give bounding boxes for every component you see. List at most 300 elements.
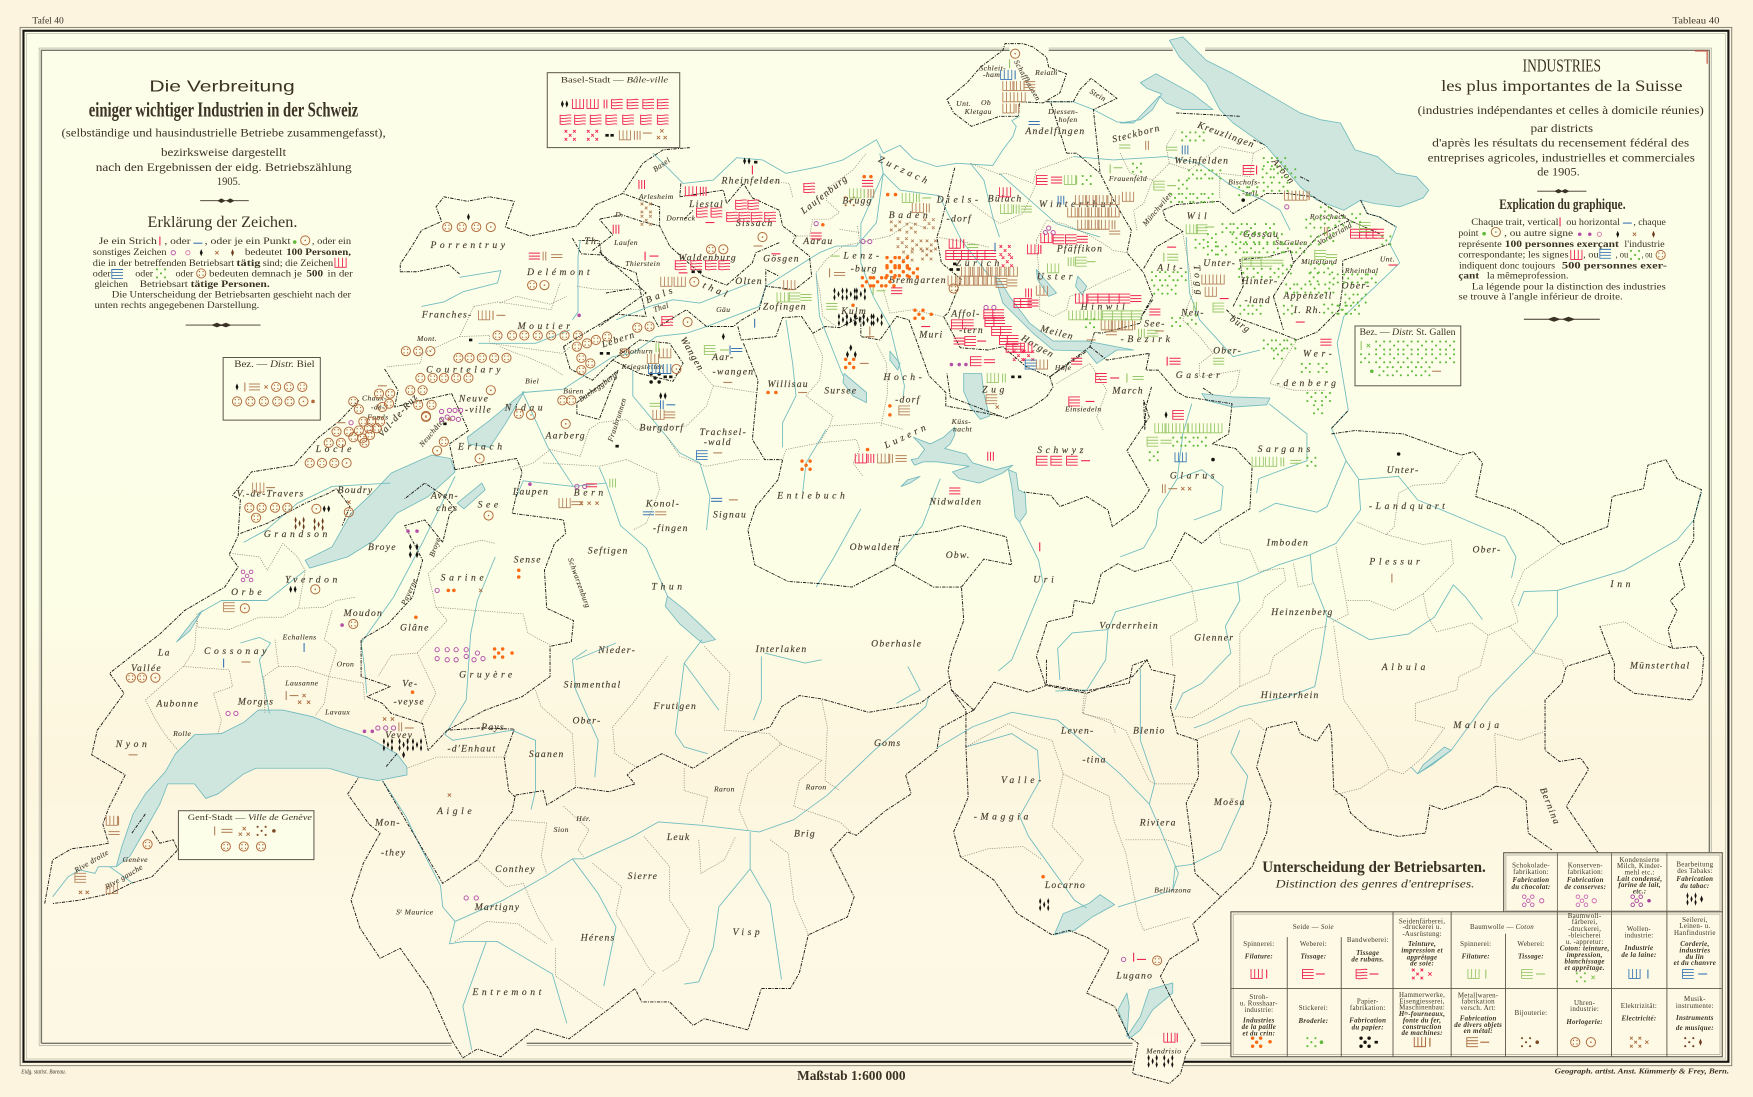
district labels: Kriegstetten (621, 362, 664, 371)
descriptive lines: par districts (1531, 122, 1594, 135)
district labels: Appenzell (1283, 291, 1333, 302)
district labels: Boudry (338, 485, 373, 496)
district labels: Aven- (430, 491, 459, 502)
legend cells: lower row: versch. Art: (1460, 1005, 1496, 1012)
legend cells: lower row: Papier- (1357, 998, 1379, 1005)
legend cells: wool and hemp: de la laine: (1621, 952, 1657, 959)
district labels: Lavaux (324, 708, 350, 717)
subtitle: (selbständige und hausindustrielle Betriebe zusammengefasst), (61, 126, 386, 139)
district labels: Orbe (231, 587, 265, 598)
district labels: Gäu (716, 305, 731, 314)
district labels: Thal (652, 301, 670, 314)
explanation text: bedeuten demnach je (209, 269, 302, 279)
district labels: Grandson (264, 529, 331, 540)
explanation text: gleichen (94, 280, 128, 290)
district labels: Brugg (842, 196, 873, 207)
legend cells: lower row: Stroh- (1249, 994, 1269, 1001)
legend cells: lower row: Horlogerie: (1565, 1019, 1603, 1026)
district labels: -veyse (393, 696, 425, 707)
district labels: Lugano (1115, 970, 1153, 981)
legend cells: wool and hemp: Hanfindustrie (1674, 930, 1716, 937)
legend cells: lower row: industrie: (1244, 1007, 1273, 1014)
district labels: Bischofs- (1228, 178, 1260, 187)
district labels: Bremgarten (889, 275, 947, 286)
legend cells: silk: de rubans. (1351, 957, 1384, 964)
district labels: Basel (651, 155, 672, 174)
district labels: Raron (805, 782, 827, 791)
legend table: upper box: fabrikation: (1513, 869, 1549, 876)
legend cells: cotton: blanchissage (1564, 958, 1605, 965)
district labels: Wer- (1303, 349, 1335, 360)
district labels: -dorf (947, 213, 972, 224)
district labels: Hinwil (1080, 302, 1128, 313)
legend table: upper box: Konserven- (1568, 862, 1603, 869)
explanation text: Je ein Strich (99, 237, 157, 247)
district labels: -land (1245, 295, 1271, 306)
district labels: Cossonay (204, 646, 270, 657)
legend heading: Unterscheidung der Betriebsarten: Distinction des genres d'entreprises. (1274, 878, 1475, 890)
district labels: Kulm (840, 306, 867, 317)
legend cells: wool and hemp: industries (1679, 947, 1710, 954)
explanation text: représente (1458, 240, 1502, 250)
district labels: Courtelary (426, 364, 504, 375)
district labels: Diessen- (1047, 107, 1078, 116)
legend cells: lower row: du papier: (1352, 1024, 1384, 1031)
district labels: Lebern (599, 329, 637, 351)
symbols: straw orange (411, 175, 1045, 878)
district labels: Imboden (1266, 538, 1309, 549)
district labels: Brig (794, 828, 816, 839)
district labels: Einsiedeln (1064, 405, 1102, 414)
ornament (186, 323, 260, 327)
district labels: V.-de-Travers (237, 489, 304, 500)
district labels: -tern (959, 325, 984, 336)
district labels: Maloja (1452, 720, 1503, 731)
legend cells: silk: Weberei: (1300, 941, 1327, 948)
district labels: Lausanne (284, 678, 319, 687)
symbols: silk red (529, 166, 1397, 1042)
district labels: -ham (983, 70, 1000, 79)
district labels: See (478, 500, 502, 511)
district labels: Gossau (1243, 229, 1279, 240)
explanation text: La légende pour la distinction des industries (1472, 282, 1666, 292)
district labels: Diels- (936, 194, 982, 205)
explanation text (1458, 217, 1667, 303)
district labels: Ob (981, 98, 991, 107)
legend cells: cotton: u. -appretur: (1566, 939, 1604, 946)
district labels: D. (614, 210, 624, 219)
district labels: Payerne (399, 577, 419, 607)
district labels: Simmenthal (564, 680, 621, 691)
district labels: Uri (1033, 575, 1057, 586)
legend table: upper box: Milch, Kinder- (1617, 863, 1663, 870)
district labels: Nidwalden (929, 496, 982, 507)
district labels: -denberg (1277, 378, 1340, 389)
right title block (1418, 56, 1704, 321)
legend cells: silk: impression et (1401, 948, 1444, 955)
district labels: Echallens (282, 633, 317, 642)
symbols: small crosses (79, 405, 1191, 894)
district labels: Aubonne (155, 699, 199, 710)
subtitle (61, 126, 386, 188)
legend cells: wool and hemp: industrie: (1624, 932, 1653, 939)
explanation text: Chaque trait, vertical (1471, 218, 1559, 228)
district labels: -wald (704, 437, 732, 448)
legend cells: wool and hemp: du lin (1686, 954, 1704, 961)
district labels: Locle (315, 444, 355, 455)
descriptive lines: d'après les résultats du recensement fédéral des (1432, 136, 1690, 149)
district labels: Affol- (950, 308, 981, 319)
district labels: Trachsel- (700, 427, 747, 438)
district labels: -zell (1242, 189, 1258, 198)
legend cells: lower row: Maschinenbau: (1399, 1004, 1445, 1011)
district labels: Saanen (529, 749, 565, 760)
district labels: -hofen (1056, 115, 1078, 124)
district labels: Frutigen (653, 701, 697, 712)
legend cells: lower row (1240, 992, 1714, 1048)
credit: statistical bureau: Eidg. statist. Bureau. (20, 1069, 66, 1076)
explanation text: correspondante; les signes (1458, 251, 1569, 261)
legend cells: wool and hemp (1621, 917, 1716, 978)
district labels: Leven- (1060, 726, 1095, 737)
district labels: Hinter- (1241, 276, 1278, 287)
legend cells: cotton: Baumwolle — Coton (1470, 924, 1534, 931)
legend cells: cotton: -bleicherei (1568, 932, 1601, 939)
legend cells: silk: Spinnerei: (1243, 941, 1274, 948)
district labels: Rheinthal (1344, 266, 1378, 275)
legend heading: Unterscheidung der Betriebsarten (1262, 859, 1486, 890)
district labels: -Bezirk (1121, 334, 1173, 345)
district labels: Porrentruy (429, 240, 509, 251)
district labels: Neu- (1180, 307, 1205, 318)
explanation text: indiquent donc toujours (1459, 261, 1556, 271)
district labels: Winterthur (1039, 199, 1116, 210)
district labels: Broye (427, 536, 443, 558)
district labels: Mendrisio (1145, 1046, 1181, 1055)
legend table: upper box: Bearbeitung (1676, 862, 1714, 869)
district labels: Oberhasle (871, 638, 922, 649)
symbols: watch circles (126, 49, 1162, 965)
legend cells: wool and hemp: Wollen- (1627, 926, 1651, 933)
explanation text: se trouve à l'angle inférieur de droite. (1458, 293, 1623, 303)
district labels: Schwarzenburg (566, 557, 592, 609)
district labels: Zurzach (876, 154, 932, 188)
subtitle: 1905. (217, 175, 240, 188)
district labels: Neuchâtel (417, 416, 446, 449)
district labels: Schwyz (1037, 445, 1087, 456)
symbols: brown straw / metal (75, 81, 1392, 893)
district labels: Bern (574, 487, 607, 498)
district labels: Aigle (436, 806, 475, 817)
legend table: upper box: fabrikation: (1567, 869, 1603, 876)
explanation text: , ou (1583, 251, 1599, 261)
district labels: Sion (554, 825, 569, 834)
legend table: upper box: du tabac: (1680, 883, 1709, 890)
legend cells: cotton: Baumwoll- (1568, 913, 1602, 920)
district labels: Unter- (1387, 465, 1419, 476)
district labels: -burg (851, 264, 878, 275)
legend cells: silk (1243, 918, 1445, 979)
district labels: Franches- (421, 310, 472, 321)
legend table: upper box: Kondensierte (1620, 857, 1660, 864)
legend cells: lower row: Musik- (1684, 996, 1706, 1003)
legend table: upper box: Fabrication (1676, 876, 1713, 883)
district labels: Val-de-Ruz (376, 392, 421, 439)
legend cells: lower row: de divers objets (1454, 1022, 1502, 1029)
inset: Genf-Stadt (178, 811, 314, 860)
district labels: Sursee (824, 386, 857, 397)
legend cells: lower row: de la paille (1242, 1024, 1276, 1031)
explanation text: oder (135, 269, 153, 279)
district labels: Bals (644, 284, 678, 306)
district labels: ches (436, 503, 458, 514)
legend cells: lower row: Metallwaren- (1458, 992, 1499, 999)
district labels: Stein (1088, 87, 1108, 103)
district labels: Erlach (457, 442, 506, 453)
inset: Bez. Distr. Biel (223, 358, 320, 420)
district labels: Neuve (458, 393, 489, 404)
district labels: Frauenfeld (1108, 174, 1147, 183)
legend cells: lower row: Broderie: (1297, 1018, 1328, 1025)
subtitle: les plus importantes: les plus importantes de la Suisse (1441, 78, 1683, 95)
legend heading: Unterscheidung der Betriebsarten: Unterscheidung der Betriebsarten. (1262, 859, 1486, 876)
district labels: Gaster (1176, 370, 1223, 381)
explanation text: sonstiges Zeichen (93, 248, 167, 258)
district labels: Conthey (495, 864, 536, 875)
district labels: Hoch- (882, 372, 925, 383)
district labels: Aarau (802, 236, 833, 247)
left title block (61, 79, 386, 327)
legend cells: wool and hemp: et du chanvre (1674, 960, 1716, 967)
explanation text: die in der betreffenden Betriebsart (93, 259, 235, 269)
district labels: Riviera (1139, 817, 1177, 828)
district labels: March (1111, 386, 1144, 397)
district labels: Schleit- (979, 63, 1006, 72)
district labels: Nidau (504, 402, 546, 413)
district labels: Obwalden (850, 542, 899, 553)
district labels: Kletgau (964, 107, 992, 116)
legend table: upper box: Schokolade- (1512, 862, 1550, 869)
corner label: Tafel 40: Tafel 40 (32, 15, 64, 25)
district labels: Horgen (1018, 332, 1056, 361)
district labels: Heinzenberg (1270, 607, 1334, 618)
district labels: Nyon (115, 739, 150, 750)
descriptive lines (1418, 104, 1704, 179)
district labels: Arbon (1269, 156, 1297, 187)
district labels: Morges (237, 696, 274, 707)
district labels: Sissach (736, 218, 773, 229)
district labels: Laufenburg (798, 173, 850, 217)
explanation text: , chaque (1633, 218, 1666, 228)
Mendrisio tip over the frame (1133, 1038, 1195, 1084)
legend cells: lower row: construction (1403, 1024, 1442, 1031)
district labels: Aarberg (545, 430, 586, 441)
district labels: Glarus (1170, 471, 1218, 482)
legend cells: cotton: Coton: teinture, (1560, 946, 1610, 953)
district labels: burg (1228, 313, 1253, 336)
district labels: Broye (368, 542, 397, 553)
legend table: upper box: des Tabaks: (1677, 868, 1713, 875)
explanation text: unten rechts angegebenen Darstellung. (94, 301, 259, 311)
legend cells: lower row: u. Rosshaar- (1240, 1001, 1278, 1008)
district labels: Uster (1037, 272, 1076, 283)
legend cells: lower row: fonte du fer, (1403, 1017, 1441, 1024)
district labels: Zofingen (763, 302, 807, 313)
legend cells: silk: de soie: (1410, 961, 1434, 968)
district labels: thal (701, 280, 732, 301)
district labels: Interlaken (755, 644, 807, 655)
legend cells: lower row: H (1399, 1011, 1405, 1018)
district labels: Glâne (400, 623, 430, 634)
district labels: Baden (889, 210, 931, 221)
district labels: Bellinzona (1154, 885, 1191, 894)
district labels: Nieder- (597, 645, 636, 656)
district labels: Bülach (988, 193, 1022, 204)
legend cells: lower row: et du crin: (1243, 1031, 1275, 1038)
explanation text: in der (328, 269, 353, 279)
district labels: Sargans (1258, 444, 1314, 455)
explanation text: çant (1458, 271, 1480, 281)
district labels: Andelfingen (1024, 126, 1085, 137)
district labels: Vorderrhein (1099, 620, 1159, 631)
explanation text: Die Unterscheidung der Betriebsarten geschieht nach der (112, 290, 351, 300)
district labels: Rheinfelden (721, 175, 781, 186)
descriptive lines: (industries indépendantes et celles à domicile réunies) (1418, 104, 1704, 117)
district labels: Rive gauche (103, 862, 145, 892)
legend cells: silk: Tissage (1356, 950, 1379, 957)
district labels: Sense (514, 554, 542, 565)
legend table: upper box: mehl etc.: (1625, 869, 1655, 876)
lakes (116, 37, 1451, 1039)
legend cells: silk: Seide — Soie (1293, 924, 1334, 931)
legend table: upper box: du chocolat: (1512, 884, 1550, 891)
district labels: Glenner (1194, 633, 1234, 644)
inset: Bez. Distr. St. Gallen: Bez. — Distr. St. Gallen (1359, 327, 1456, 337)
explanation text: oder (176, 269, 193, 279)
explanation text: 100 personnes exerçant (1505, 240, 1620, 250)
district labels: Raron (713, 785, 735, 794)
district labels: Blenio (1133, 726, 1166, 737)
legend cells: lower row: -fourneaux, (1408, 1011, 1445, 1018)
legend cells: cotton: -druckerei, (1568, 926, 1601, 933)
district labels: Laupen (512, 486, 549, 497)
legend cells: lower row: Stickerei: (1299, 1005, 1328, 1012)
district labels: Sarine (441, 572, 487, 583)
explanation text: tätige Personen. (191, 280, 270, 290)
explanation text: , ou (1642, 251, 1653, 261)
district labels: Arlesheim (638, 192, 674, 201)
district labels: Steckborn (1111, 123, 1162, 145)
legend cells: lower row: en métal: (1464, 1028, 1493, 1035)
district labels: Willisau (768, 379, 809, 390)
symbols: chocolate and condensed milk purple (226, 205, 1289, 962)
corner label: Tableau 40: Tableau 40 (1673, 15, 1720, 25)
district labels: See- (1144, 319, 1166, 330)
legend table: upper box: Fabrication (1513, 877, 1549, 884)
district labels: Laufen (613, 238, 638, 247)
legend cells: wool and hemp: Leinen- u. (1679, 923, 1710, 930)
legend cells: lower row: Eisengiesserei, (1399, 998, 1445, 1005)
district labels: Unter- (1203, 258, 1236, 269)
legend cells: silk: Teinture, (1408, 941, 1436, 948)
district labels: Gösgen (763, 254, 800, 265)
explanation text: , oder (164, 237, 191, 247)
district labels: Chaux- (362, 393, 387, 402)
district labels: -Maggia (974, 812, 1032, 823)
district labels: Gruyère (459, 670, 516, 681)
district labels: Reiath (1034, 68, 1058, 77)
district labels: Mon- (374, 817, 401, 828)
explanation text (93, 236, 353, 311)
district labels: Zug (982, 385, 1008, 396)
explanation text: , oder je ein Punkt (205, 237, 291, 247)
symbols: wool blue (224, 70, 1188, 668)
district labels: Alt- (1156, 263, 1186, 274)
district labels: Hérens (580, 932, 616, 943)
district labels: Ober- (1213, 345, 1242, 356)
legend cells: silk: apprêtage (1407, 954, 1437, 961)
district labels: Küss- (951, 417, 971, 426)
district labels: Vallée (131, 663, 162, 674)
district labels: Vorderland (1316, 220, 1354, 247)
district labels: Waldenburg (678, 253, 737, 264)
legend cells: lower row: Bijouterie: (1515, 1010, 1547, 1017)
district labels: Thun (652, 581, 686, 592)
district labels: Lenz- (842, 250, 883, 261)
district labels: Unt. (1380, 255, 1395, 264)
explanation text: 100 Personen, (286, 248, 351, 258)
district labels: Signau (713, 510, 747, 521)
legend cells: lower row: Fabrication (1460, 1016, 1497, 1023)
district labels: Höfe (1054, 363, 1072, 372)
district labels: -wangen (713, 367, 754, 378)
district labels: -they (381, 847, 406, 858)
legend cells: lower row: de machines: (1401, 1030, 1443, 1037)
district labels: Ober- (1342, 281, 1371, 292)
district labels: Visp (733, 927, 763, 938)
explanation text: , oder ein (312, 237, 351, 247)
district labels: Olten (735, 276, 763, 287)
ornament (1537, 190, 1586, 193)
district labels: Pays (480, 722, 505, 733)
explanation text: bedeutet (245, 248, 283, 258)
legend table: upper box: etc.: (1633, 888, 1646, 895)
district labels: Muri (918, 330, 943, 341)
district labels: -tina (1082, 755, 1107, 766)
district labels: Münchwilen (1140, 190, 1174, 228)
legend table: upper box: farine de lait, (1618, 882, 1661, 889)
legend cells: silk: Seidenfärberei, (1399, 918, 1445, 925)
district labels: Bucheggberg (577, 370, 619, 404)
district labels: Thierstein (625, 259, 660, 268)
explanation text: oder (93, 269, 111, 279)
legend table: upper box: Fabrication (1567, 877, 1604, 884)
legend cells: lower row: Hammerwerke, (1399, 992, 1445, 999)
legend cells: lower row: de musique: (1676, 1025, 1714, 1032)
district labels: Sierre (628, 871, 658, 882)
district labels: Mittelland (1300, 257, 1337, 266)
legend table: upper box: Lait condensé, (1616, 876, 1662, 883)
legend cells: lower row: Industries (1242, 1018, 1275, 1025)
symbols: cotton green (610, 59, 1371, 488)
ornament (200, 199, 249, 203)
district labels: Genève (123, 855, 148, 864)
legend cells: lower row: instrumente: (1676, 1003, 1714, 1010)
legend cells: silk: -druckerei u. (1403, 924, 1442, 931)
district labels: Locarno (1044, 880, 1086, 891)
legend cells: wool and hemp: Seilerei, (1682, 917, 1708, 924)
symbols: black paper and tobacco (289, 157, 1400, 1068)
